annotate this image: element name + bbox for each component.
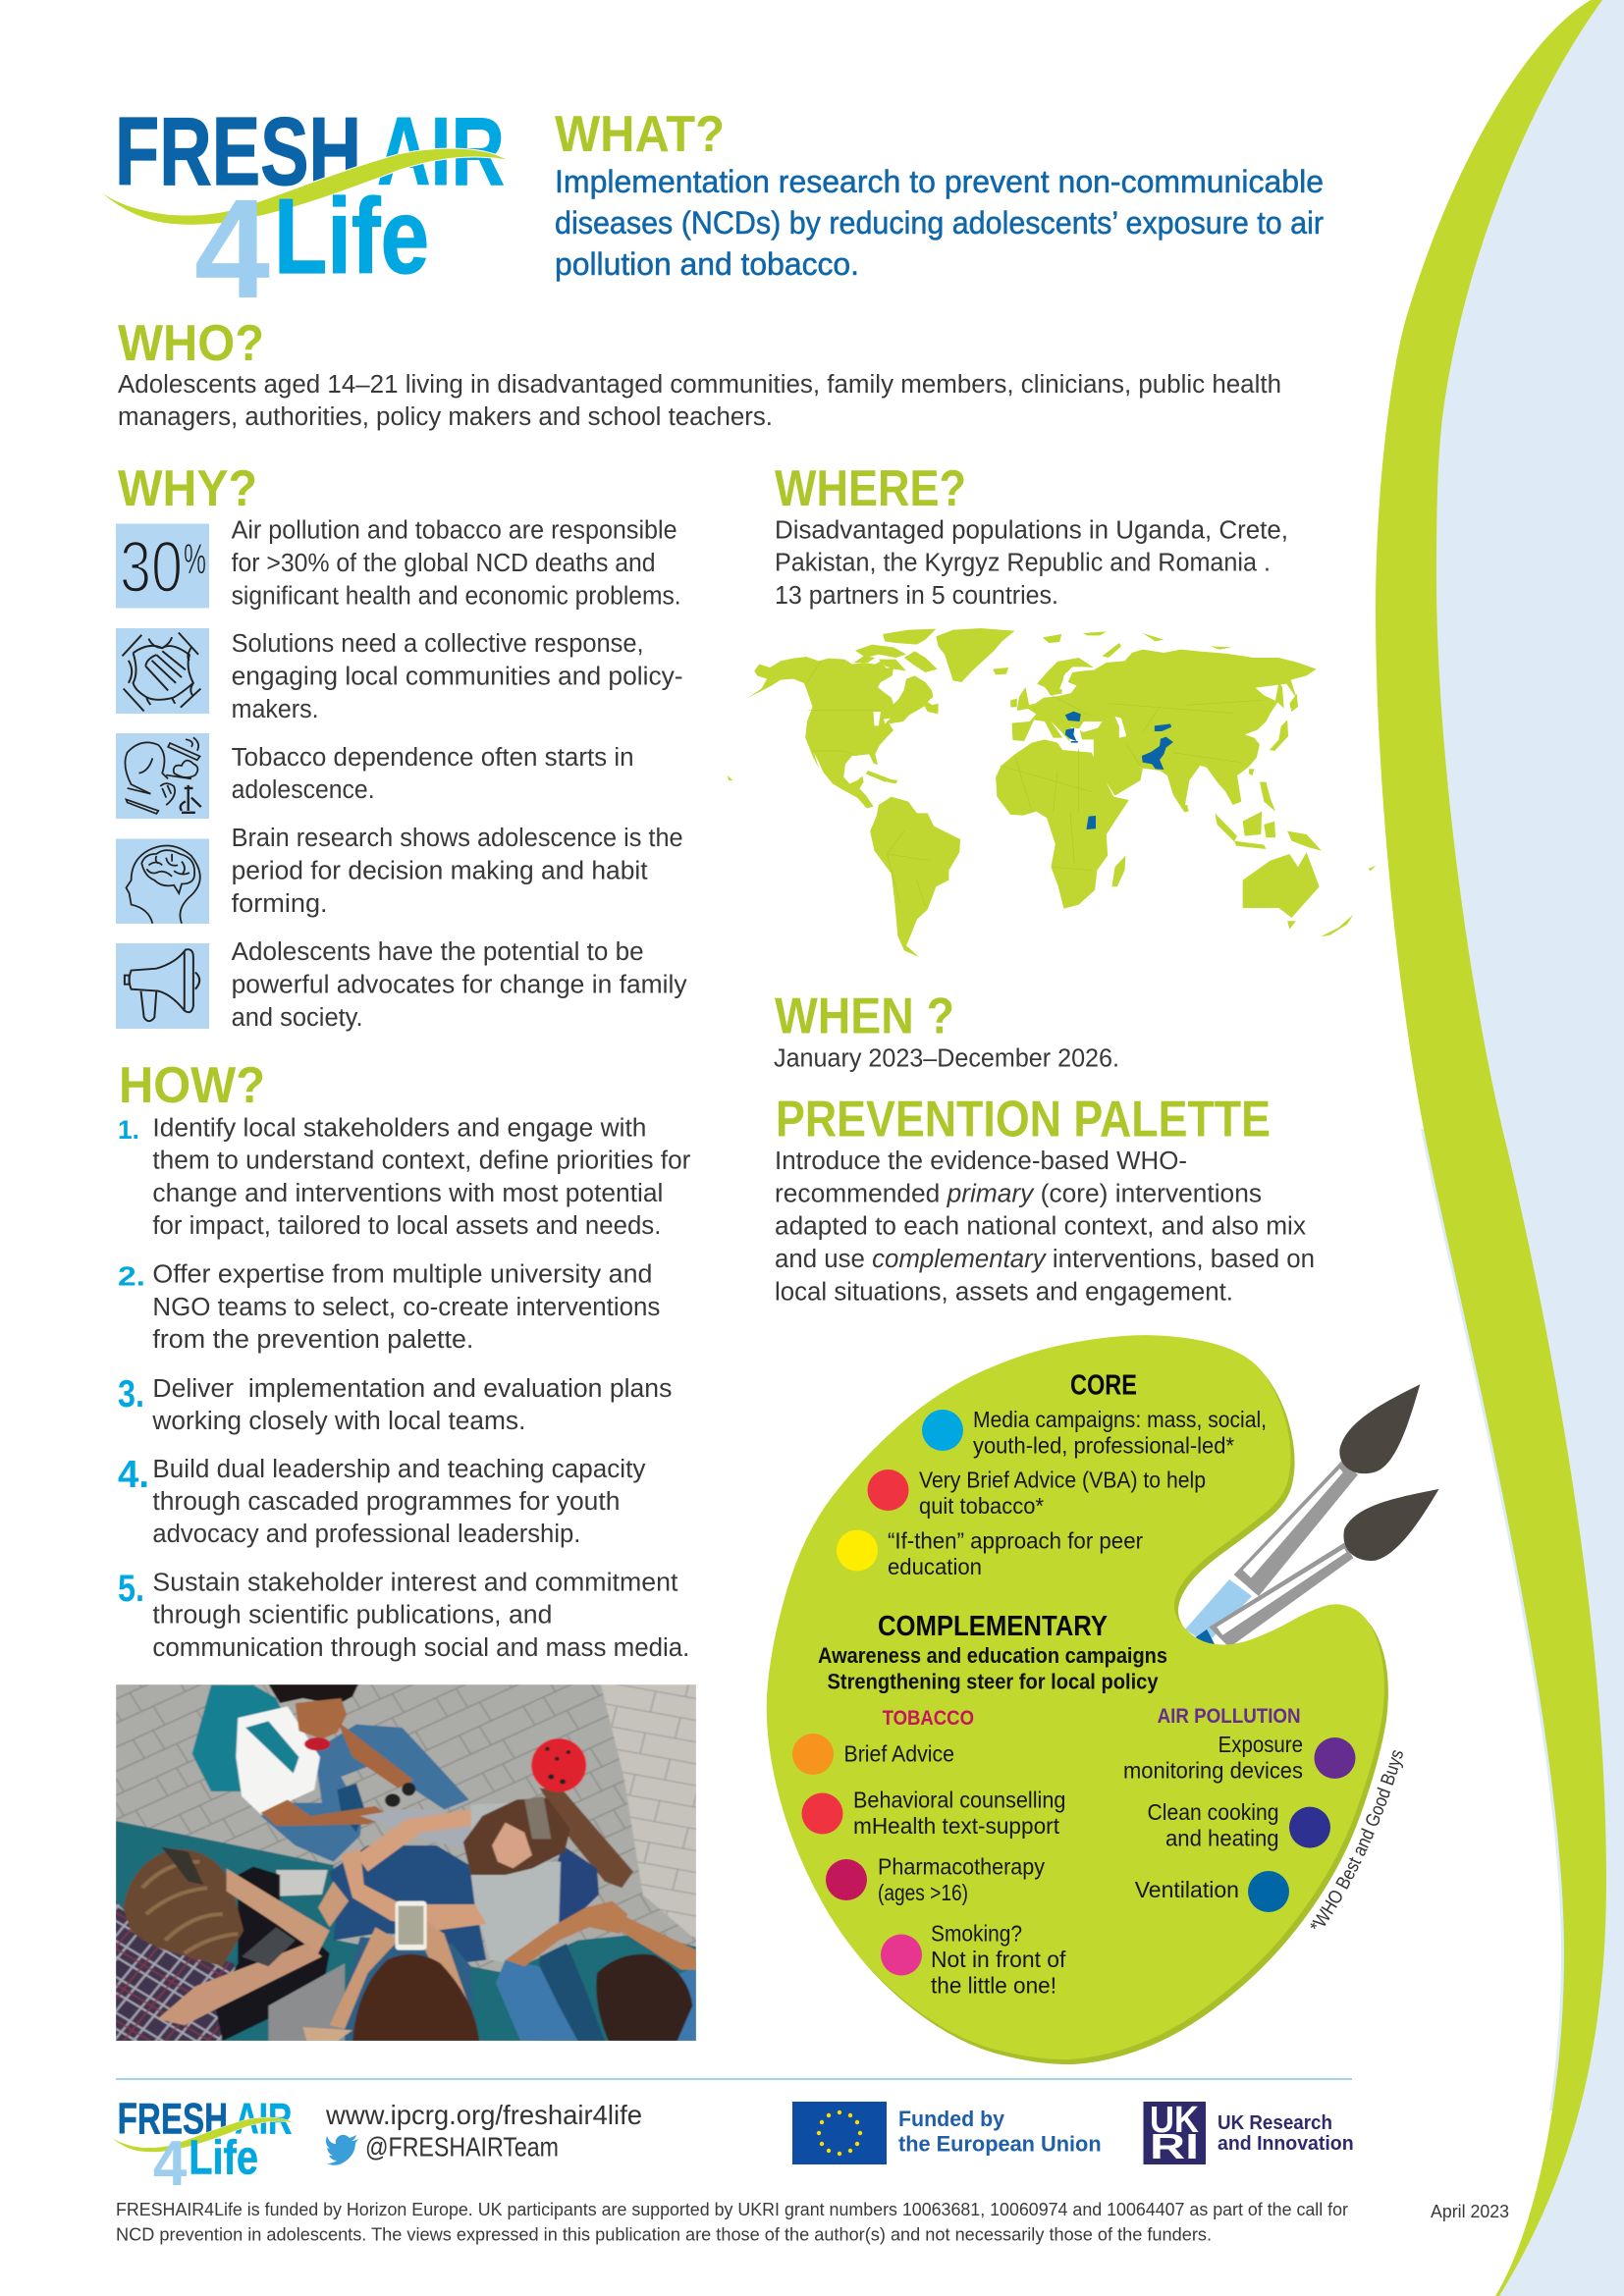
inland water (874, 672, 1126, 738)
air item: clean cooking: and heating (1165, 1826, 1279, 1851)
step 5: through scientific publications, and (152, 1602, 552, 1629)
text: what description: pollution and tobacco. (555, 246, 859, 282)
icon: megaphone (116, 943, 209, 1029)
core item: very brief advice: Very Brief Advice (VBA) to help (919, 1467, 1206, 1492)
text: why point 5 (232, 938, 687, 1032)
text: palette description: local situations, assets and engagement. (775, 1278, 1233, 1306)
step 5: Sustain stakeholder interest and commitment (152, 1569, 677, 1596)
step 1: for impact, tailored to local assets and needs. (152, 1212, 661, 1240)
heading: air pollution: AIR POLLUTION (1158, 1705, 1301, 1728)
text: palette description: recommended primary (core) interventions (775, 1180, 1262, 1207)
text: why point 5: and society. (232, 1004, 363, 1032)
helmet and board (540, 1789, 633, 1888)
icon: 30 percent: % (184, 535, 206, 583)
text: who description: Adolescents aged 14–21 living in disadvantaged communities, family members, clinicians, public health (118, 371, 1281, 399)
text: what description: Implementation research to prevent non-communicable (555, 164, 1324, 199)
text: why point 3: adolescence. (232, 776, 375, 804)
heading: complementary: COMPLEMENTARY (878, 1611, 1108, 1642)
air item: clean cooking (1147, 1799, 1330, 1851)
air item: exposure monitoring: Exposure (1218, 1732, 1303, 1757)
tobacco item: smoking: the little one! (931, 1973, 1056, 1999)
footer logo: FRESHAIR4Life (107, 2095, 294, 2199)
text: why point 4: forming. (232, 890, 328, 918)
panel: who (118, 315, 1281, 431)
step 2: NGO teams to select, co-create interventions (152, 1294, 660, 1321)
footer logo: FRESHAIR4Life: Life (189, 2130, 258, 2185)
step 4: 4. (118, 1454, 149, 1496)
air item: ventilation: Ventilation (1135, 1877, 1239, 1902)
core item: if-then: education (888, 1554, 982, 1579)
heading: where: WHERE? (775, 460, 966, 517)
panel: what (555, 106, 1324, 282)
heading: prevention palette: PREVENTION PALETTE (776, 1092, 1271, 1148)
text: why point 4 (232, 825, 683, 918)
logo: FRESHAIR4Life: FRESH (115, 97, 361, 205)
step 1: them to understand context, define priorities for (152, 1148, 691, 1175)
icon: 30 percent: 30 (120, 526, 183, 608)
text: why point 1: for >30% of the global NCD deaths and (232, 550, 656, 577)
panel: when (774, 988, 1119, 1073)
text: why point 2: Solutions need a collective response, (232, 630, 644, 658)
step 1: 1. (118, 1115, 139, 1145)
step 3: Deliver implementation and evaluation plans (152, 1375, 672, 1403)
icon: twitter bird (326, 2135, 358, 2165)
funder: UK Research and Innovation: UK Research (1218, 2112, 1332, 2134)
step 4: through cascaded programmes for youth (152, 1488, 620, 1516)
highlighted countries (1065, 712, 1173, 829)
step 2: from the prevention palette. (152, 1326, 473, 1354)
background: flowing green and blue wave (1373, 0, 1624, 2296)
person five (540, 1944, 605, 2041)
text: where description: 13 partners in 5 countries. (775, 582, 1058, 610)
person four (268, 1963, 345, 2041)
icon: EU flag (792, 2102, 887, 2164)
photo: adolescents sitting together (116, 1684, 696, 2041)
step 3 (118, 1373, 672, 1435)
heading: who: WHO? (118, 315, 264, 372)
panel: how (118, 1057, 691, 1662)
complementary subheading: Awareness and education campaigns (818, 1643, 1167, 1668)
text: why point 3 (232, 744, 634, 804)
text: what description (555, 164, 1324, 282)
panel: palette (767, 1335, 1388, 2064)
text: why point 1: Air pollution and tobacco are responsible (232, 516, 677, 544)
funder: UK Research and Innovation (1143, 2100, 1354, 2166)
complementary subheading: Strengthening steer for local policy (827, 1669, 1159, 1694)
panel: where (728, 460, 1376, 957)
tobacco item: brief advice (792, 1734, 954, 1775)
step 2 (118, 1261, 660, 1354)
country borders (806, 661, 1262, 906)
tobacco item: pharmacotherapy: Pharmacotherapy (878, 1854, 1045, 1880)
funder: European Union (792, 2102, 1102, 2164)
core item: if-then (837, 1527, 1143, 1579)
icon: UKRI mark: RI (1150, 2126, 1199, 2166)
text: why point 2: engaging local communities and policy- (232, 664, 683, 691)
funder: European Union: the European Union (898, 2132, 1102, 2157)
text: why point 4: period for decision making and habit (232, 858, 648, 885)
icon: joined hands (116, 628, 209, 714)
text: where description: Disadvantaged populations in Uganda, Crete, (775, 516, 1288, 544)
icon: brain in head (116, 838, 209, 924)
text: palette description: and use complementary interventions, based on (775, 1246, 1315, 1273)
footer contact: www.ipcrg.org/freshair4life (325, 2100, 642, 2130)
text: funding disclaimer: FRESHAIR4Life is funded by Horizon Europe. UK participants are supported by UKRI grant numbers 10063681, 10060974 and 10064407 as part of the call for (116, 2199, 1348, 2219)
logo: FRESHAIR4Life: AIR (377, 97, 505, 205)
core item: media campaigns (922, 1407, 1267, 1459)
step 1 (118, 1114, 691, 1240)
air item: exposure monitoring: monitoring devices (1123, 1758, 1303, 1784)
text: date: April 2023 (1431, 2201, 1509, 2221)
heading: tobacco: TOBACCO (883, 1707, 974, 1730)
logo: FRESHAIR4Life: 4 (194, 170, 270, 328)
tobacco item: smoking: Smoking? (931, 1920, 1022, 1946)
footer logo: FRESHAIR4Life: 4 (153, 2127, 187, 2199)
world map (728, 628, 1376, 957)
text: why point 1: significant health and economic problems. (232, 582, 681, 610)
text: why point 2 (232, 630, 683, 723)
text: who description: managers, authorities, policy makers and school teachers. (118, 403, 773, 431)
palette shape (767, 1335, 1388, 2064)
text: why point 3: Tobacco dependence often starts in (232, 744, 634, 772)
person three (116, 1901, 238, 2041)
heading: what: WHAT? (555, 106, 725, 163)
text: funding disclaimer (116, 2199, 1348, 2245)
step 5 (118, 1568, 689, 1662)
core item: very brief advice: quit tobacco* (919, 1493, 1044, 1519)
footer rule (116, 2078, 1352, 2080)
complementary subheading (818, 1643, 1167, 1694)
text: where description (775, 516, 1288, 610)
icon: tobacco use (116, 733, 209, 819)
core item: media campaigns: youth-led, professional-led* (973, 1433, 1234, 1459)
text: funding disclaimer: NCD prevention in adolescents. The views expressed in this publication are those of the author(s) and not necessarily those of the funders. (116, 2224, 1212, 2245)
core item: very brief advice (868, 1467, 1206, 1519)
tobacco item: smoking: Not in front of (931, 1947, 1066, 1972)
text: when dates: January 2023–December 2026. (774, 1045, 1119, 1073)
core item: media campaigns: Media campaigns: mass, social, (973, 1407, 1267, 1432)
core item: if-then: “If-then” approach for peer (888, 1527, 1143, 1553)
text: why point 4: Brain research shows adolescence is the (232, 825, 683, 852)
step 3: working closely with local teams. (151, 1408, 525, 1435)
step 5: communication through social and mass media. (152, 1634, 689, 1662)
text: where description: Pakistan, the Kyrgyz Republic and Romania . (775, 550, 1271, 577)
text: palette description: Introduce the evidence-based WHO- (775, 1148, 1187, 1175)
icon: UKRI mark: UK (1150, 2100, 1200, 2141)
heading: core: CORE (1070, 1370, 1137, 1402)
step 2: 2. (118, 1261, 145, 1292)
step 2: Offer expertise from multiple university and (152, 1261, 652, 1289)
step 1: Identify local stakeholders and engage with (152, 1114, 646, 1142)
tobacco item: smoking (881, 1920, 1066, 1999)
step 3: 3. (118, 1373, 144, 1415)
tobacco item: pharmacotherapy: (ages >16) (878, 1880, 968, 1905)
funder: UK Research and Innovation: and Innovation (1218, 2133, 1354, 2155)
heading: when: WHEN ? (775, 988, 954, 1045)
funder: European Union: Funded by (898, 2107, 1005, 2131)
step 4: advocacy and professional leadership. (152, 1521, 580, 1548)
step 4 (118, 1454, 646, 1548)
tobacco item: behavioral counselling: mHealth text-support (853, 1813, 1059, 1839)
air item: clean cooking: Clean cooking (1147, 1799, 1278, 1825)
logo: FRESHAIR4Life (92, 97, 509, 328)
text: palette description (775, 1148, 1315, 1306)
text: palette description: adapted to each national context, and also mix (775, 1213, 1306, 1241)
heading: why: WHY? (118, 460, 257, 517)
text: what description: diseases (NCDs) by reducing adolescents’ exposure to air (555, 205, 1324, 240)
panel: prevention palette intro (775, 1092, 1315, 1306)
text: why point 5: powerful advocates for change in family (232, 972, 687, 999)
step 4: Build dual leadership and teaching capacity (152, 1456, 646, 1483)
tobacco item: behavioral counselling (801, 1788, 1065, 1839)
icon: UKRI mark (1143, 2100, 1206, 2166)
footer contact: @FRESHAIRTeam (365, 2132, 559, 2163)
text: why point 5: Adolescents have the potential to be (232, 938, 644, 966)
footnote: WHO best buys: *WHO Best and Good Buys (1310, 1750, 1404, 1930)
tobacco item: brief advice: Brief Advice (844, 1741, 954, 1767)
text: why point 1 (232, 516, 681, 610)
tobacco item: pharmacotherapy (826, 1854, 1045, 1905)
air item: ventilation (1135, 1871, 1289, 1912)
person two (558, 1847, 599, 1923)
text: who description (118, 371, 1281, 431)
text: why point 2: makers. (232, 696, 319, 723)
footer contact (325, 2100, 642, 2165)
air item: exposure monitoring (1123, 1732, 1355, 1784)
footer logo: FRESHAIR4Life: FRESH (118, 2095, 228, 2144)
tobacco item: behavioral counselling: Behavioral counselling (853, 1788, 1065, 1813)
logo: FRESHAIR4Life: Life (274, 177, 429, 296)
panel: why (116, 460, 687, 1032)
step 1: change and interventions with most potential (152, 1180, 663, 1207)
icon: paint brushes (1185, 1384, 1439, 1651)
step 5: 5. (118, 1568, 144, 1610)
heading: how: HOW? (119, 1057, 265, 1114)
person one (190, 1684, 281, 1792)
footer logo: FRESHAIR4Life: AIR (235, 2095, 292, 2144)
